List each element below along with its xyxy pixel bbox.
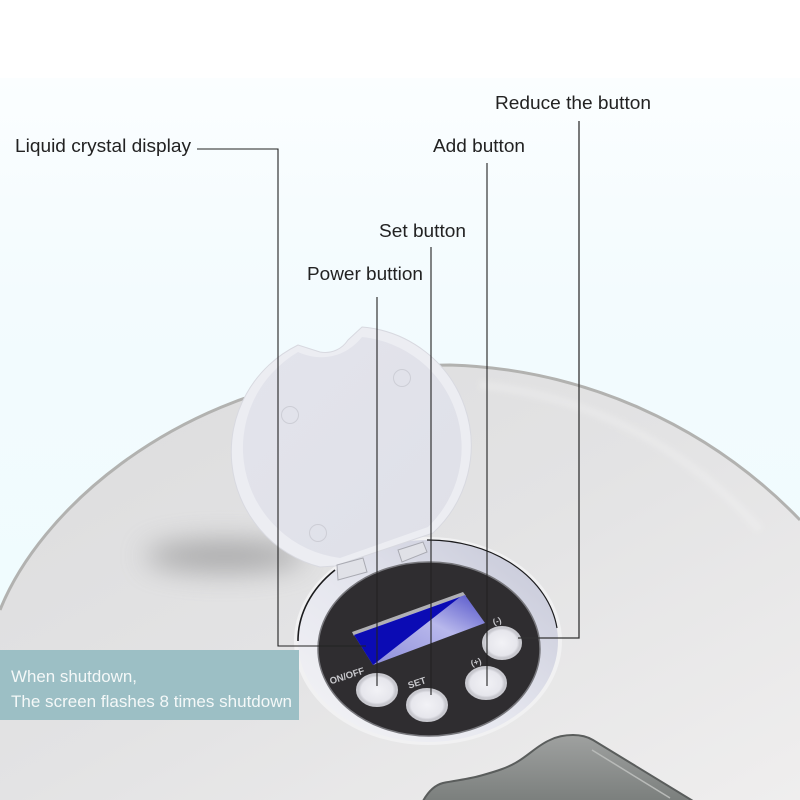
- shutdown note: The screen flashes 8 times shutdown: [11, 692, 292, 711]
- food tray: [423, 735, 693, 800]
- lid inner face: [243, 337, 462, 558]
- button ON/OFF: ON/OFF: [328, 666, 366, 687]
- LCD screen: [354, 595, 485, 665]
- button ON/OFF: [328, 666, 397, 706]
- callout: reduce button: Reduce the button: [495, 93, 651, 113]
- black panel: [318, 562, 540, 736]
- shutdown note: [0, 650, 299, 720]
- LCD frame strip: [352, 592, 466, 636]
- control recess: [294, 537, 562, 745]
- button plus: (+): [469, 656, 483, 668]
- callout: power button: Power buttion: [307, 264, 423, 284]
- callout: add button: Add button: [433, 136, 525, 156]
- shutdown note: When shutdown,: [11, 667, 137, 686]
- callout: reduce button: [495, 93, 651, 638]
- shadow under lid: [145, 541, 305, 571]
- button SET: SET: [407, 675, 428, 692]
- recess arc left: [298, 570, 335, 641]
- button plus: [466, 656, 506, 699]
- button minus: (-): [491, 615, 503, 627]
- lid dimples: [282, 370, 410, 542]
- hinge left: [337, 558, 367, 580]
- button minus: [483, 615, 521, 659]
- callout: set button: Set button: [379, 221, 466, 241]
- open lid: [231, 327, 471, 580]
- feeder body: [0, 365, 800, 800]
- hinge right: [398, 542, 427, 562]
- recess arc right: [427, 540, 557, 628]
- body top edge: [0, 365, 800, 610]
- callout: liquid crystal display: Liquid crystal display: [15, 136, 191, 156]
- button SET: [407, 675, 447, 721]
- callout: liquid crystal display: [15, 136, 366, 646]
- soft highlight: [480, 385, 760, 530]
